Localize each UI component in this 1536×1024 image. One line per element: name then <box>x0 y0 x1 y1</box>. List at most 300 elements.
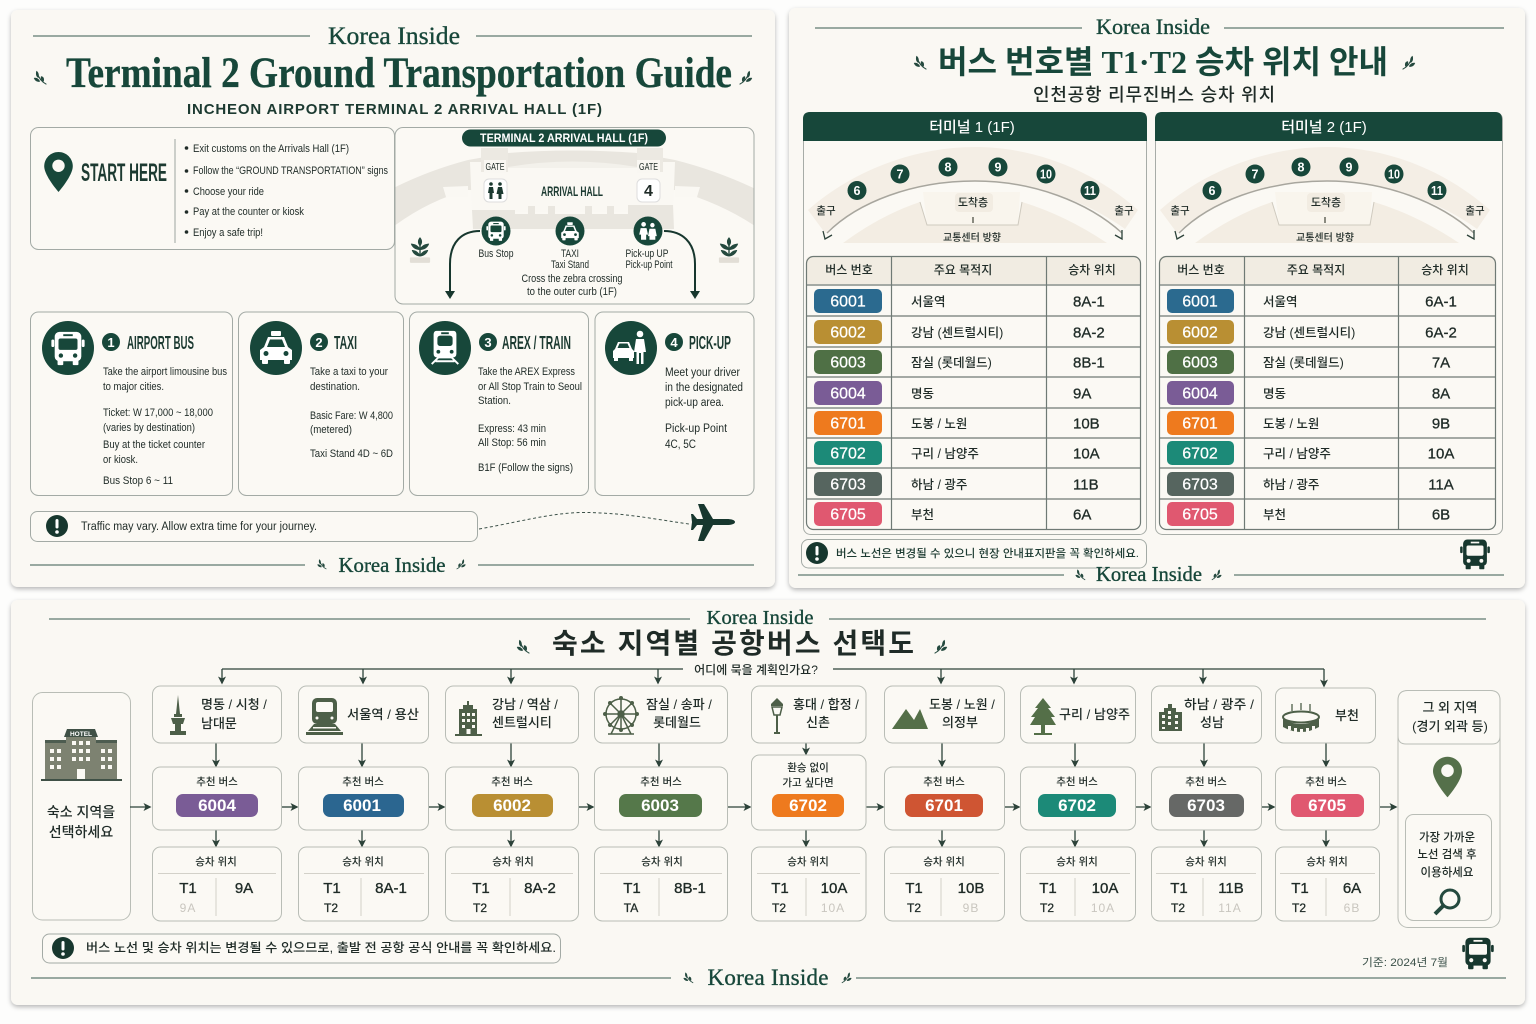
map labels: Pick-up Point <box>626 259 672 271</box>
row 6001: 6001 <box>1182 294 1218 310</box>
area: gangnam: 강남 / 역삼 / <box>492 697 558 712</box>
boarding map: 7 <box>897 168 904 182</box>
row 6003 <box>814 350 1105 374</box>
steps list: Choose your ride <box>193 186 264 198</box>
area: myeongdong: 명동 / 시청 / <box>201 697 267 712</box>
area: hanam: 성남 <box>1200 715 1224 730</box>
footer brand <box>31 965 1506 990</box>
card: taxi <box>238 312 404 496</box>
bus card: 6003: 추천 버스 <box>640 775 682 788</box>
boarding card: seoul station: T2 <box>324 901 338 915</box>
area: hanam <box>1152 686 1262 743</box>
boarding card: myeongdong: 승차 위치 <box>195 855 237 868</box>
row 6001: 6A-1 <box>1425 294 1457 310</box>
icon: tree <box>1030 698 1056 735</box>
row 6002: 8A-2 <box>1073 324 1105 342</box>
row 6705 <box>1167 502 1450 526</box>
callout: change warning: 버스 노선 및 승차 위치는 변경될 수 있으므로, 출발 전 공항 공식 안내를 꼭 확인하세요. <box>86 941 556 955</box>
panel: terminal 2 <box>1155 112 1502 534</box>
boarding map: 6 <box>1209 184 1216 198</box>
row 6004: 명동 <box>1263 387 1286 401</box>
arrow: bus stop route <box>445 231 480 299</box>
boarding card: jamsil: TA <box>624 901 638 915</box>
boarding card: dobong: 9B <box>963 901 979 915</box>
row 6004 <box>1167 381 1450 405</box>
icon: street lamp <box>771 698 783 734</box>
boarding map: 8 <box>1298 160 1305 174</box>
boarding card: guri <box>1020 847 1136 921</box>
bus card: 6002 <box>446 767 578 830</box>
boarding card: hongdae: 10A <box>821 901 845 915</box>
body text: Take a taxi to your <box>310 366 388 378</box>
bus card: 6004: 6004 <box>198 796 236 815</box>
body text: All Stop: 56 min <box>478 437 546 449</box>
icon: location pin <box>44 152 73 192</box>
right gate: GATE <box>639 162 658 173</box>
panel: terminal 1 <box>803 112 1147 534</box>
boarding map: 교통센터 방향 <box>943 231 1001 244</box>
area: jamsil <box>594 686 728 743</box>
boarding map: 9 <box>1346 160 1353 174</box>
boarding card: bucheon: T1 <box>1291 880 1309 897</box>
top brand header: Korea Inside <box>328 23 460 50</box>
title: 버스 번호별 T1·T2 승차 위치 안내 <box>938 44 1388 80</box>
steps list <box>185 143 388 239</box>
bus card: 6702 direct: 가고 싶다면 <box>782 777 834 789</box>
search advice box <box>1406 814 1492 920</box>
bus card: 6001 <box>298 767 428 830</box>
row 6701: 6701 <box>830 416 866 432</box>
title: 숙소 지역별 공항버스 선택도 <box>552 628 914 659</box>
bus table: 승차 위치 <box>1068 263 1116 277</box>
body text: Bus Stop 6 ~ 11 <box>103 475 173 487</box>
steps list: Pay at the counter or kiosk <box>193 206 305 218</box>
row 6703 <box>814 472 1099 496</box>
boarding card: dobong: T1 <box>905 880 923 897</box>
bus card: 6004 <box>152 767 282 830</box>
area: myeongdong: 남대문 <box>201 716 237 731</box>
icon: bus stop <box>482 216 510 246</box>
row 6003: 8B-1 <box>1073 354 1105 372</box>
row 6001: 서울역 <box>911 295 946 309</box>
boarding card: hongdae: 승차 위치 <box>787 855 829 868</box>
row 6703: 6703 <box>830 476 866 494</box>
bus card: 6703: 추천 버스 <box>1185 775 1227 788</box>
map labels: Bus Stop <box>478 248 514 260</box>
boarding card: jamsil: 승차 위치 <box>641 855 683 868</box>
boarding map <box>1160 147 1490 244</box>
flow arrows between steps <box>130 743 1396 846</box>
bus table: 주요 목적지 <box>934 263 992 277</box>
subtitle: 인천공항 리무진버스 승차 위치 <box>1033 85 1275 105</box>
arrow: dashed flight path <box>479 512 689 529</box>
row 6702: 6702 <box>1182 446 1218 462</box>
icon: right plant <box>719 237 739 263</box>
header bar: 터미널 2 (1F) <box>1281 119 1367 136</box>
boarding map: 10 <box>1040 168 1052 182</box>
bus card: 6703 <box>1152 767 1262 830</box>
body text: Basic Fare: W 4,800 <box>310 410 393 422</box>
icon: bus <box>42 321 94 375</box>
bus card: 6705: 6705 <box>1308 796 1346 815</box>
boarding map: 도착층 <box>1311 196 1341 209</box>
row 6002 <box>814 320 1105 344</box>
boarding card: hanam: 11A <box>1218 901 1242 915</box>
row 6703: 6703 <box>1182 476 1218 494</box>
boarding map: 11 <box>1431 184 1443 198</box>
icon: location pin <box>1433 757 1462 797</box>
heading <box>102 333 194 353</box>
area: dobong <box>884 686 1004 743</box>
bus card: 6001: 추천 버스 <box>342 775 384 788</box>
icon: hotel <box>41 729 122 781</box>
start box: choose lodging area <box>32 692 130 920</box>
label: 선택하세요 <box>49 824 113 840</box>
title: Terminal 2 Ground Transportation Guide <box>66 50 732 97</box>
icon: train <box>306 698 343 735</box>
bus card: 6004: 추천 버스 <box>196 775 238 788</box>
area: hongdae: 신촌 <box>806 715 830 730</box>
row 6705: 6A <box>1073 506 1091 524</box>
date note: 기준: 2024년 7월 <box>1362 956 1448 969</box>
icon: pick-up <box>634 216 662 246</box>
arrow: pick-up route <box>664 231 700 299</box>
icon: airplane <box>691 504 735 541</box>
body text: Taxi Stand 4D ~ 6D <box>310 448 393 460</box>
row 6003: 잠실 (롯데월드) <box>1263 355 1344 370</box>
icon: buildings <box>1159 704 1182 731</box>
bus card: 6002: 6002 <box>493 796 531 815</box>
boarding card: gangnam: T2 <box>473 901 487 915</box>
row 6003 <box>1167 350 1450 374</box>
panel: terminal 2 ground transportation guide <box>11 10 775 587</box>
row 6004: 6004 <box>830 386 866 402</box>
row 6004 <box>814 381 1091 405</box>
hall title pill: TERMINAL 2 ARRIVAL HALL (1F) <box>480 133 648 145</box>
icon: stadium <box>1283 703 1319 733</box>
boarding map: 6 <box>854 184 861 198</box>
map labels: Taxi Stand <box>551 259 589 271</box>
boarding map: 출구 <box>816 205 836 217</box>
icon: hotel: HOTEL <box>70 731 92 738</box>
panel: airport bus chooser by lodging area <box>11 600 1525 1005</box>
row 6703: 11A <box>1428 476 1454 494</box>
boarding map: 10 <box>1388 168 1400 182</box>
icon: restroom <box>484 179 507 202</box>
card: arex train <box>410 312 588 496</box>
boarding map <box>808 147 1138 244</box>
row 6002 <box>1167 320 1457 344</box>
row 6703: 하남 / 광주 <box>911 478 967 492</box>
row 6001: 서울역 <box>1263 295 1298 309</box>
row 6705: 부천 <box>911 507 934 522</box>
boarding card: dobong <box>884 847 1004 921</box>
bus card: 6702 direct: 환승 없이 <box>787 761 829 774</box>
boarding card: gangnam <box>446 847 578 921</box>
panel: other regions <box>1398 690 1500 928</box>
row 6002: 6002 <box>830 324 866 342</box>
boarding card: bucheon: 승차 위치 <box>1306 855 1348 868</box>
boarding card: dobong: T2 <box>907 901 921 915</box>
search advice box: 노선 검색 후 <box>1417 848 1477 861</box>
footer brand <box>30 553 754 577</box>
boarding map: 교통센터 방향 <box>1296 231 1354 244</box>
boarding card: myeongdong: 9A <box>235 880 253 897</box>
body text: or kiosk. <box>103 454 138 466</box>
row 6703: 하남 / 광주 <box>1263 478 1319 492</box>
bus table: 버스 번호 <box>1177 263 1225 277</box>
boarding card: gangnam: 8A-2 <box>524 880 556 897</box>
other regions header: 그 외 지역 <box>1422 700 1478 715</box>
map labels: Pick-up UP <box>626 248 668 260</box>
heading: 2 <box>315 335 323 350</box>
boarding map: 출구 <box>1114 205 1134 217</box>
body text <box>478 366 582 474</box>
bus table <box>1159 256 1496 530</box>
row 6701: 10B <box>1073 416 1100 432</box>
bus card: 6702 <box>1020 767 1136 830</box>
callout: traffic note <box>30 512 478 542</box>
body text: to major cities. <box>103 381 164 393</box>
heading: AREX / TRAIN <box>502 333 571 353</box>
area: hanam: 하남 / 광주 / <box>1184 697 1254 712</box>
row 6705: 6705 <box>830 506 866 524</box>
body text: in the designated <box>665 382 743 394</box>
boarding card: myeongdong: 9A <box>180 901 196 915</box>
map labels: TAXI <box>561 248 579 260</box>
boarding card: hanam: 11B <box>1218 880 1244 897</box>
map labels <box>478 248 672 298</box>
boarding card: jamsil <box>594 847 728 921</box>
subtitle: INCHEON AIRPORT TERMINAL 2 ARRIVAL HALL (1F) <box>187 101 602 118</box>
body text: or All Stop Train to Seoul <box>478 381 582 393</box>
heading: PICK-UP <box>689 333 731 353</box>
boarding card: hanam: T1 <box>1170 880 1188 897</box>
header bar: 터미널 1 (1F) <box>929 119 1015 136</box>
body text: Buy at the ticket counter <box>103 439 205 451</box>
boarding card: guri: 승차 위치 <box>1056 855 1098 868</box>
row 6002: 강남 (센트럴시티) <box>1263 326 1355 340</box>
icon: seoul tower <box>170 695 186 735</box>
area: gangnam: 센트럴시티 <box>492 715 552 730</box>
row 6004: 8A <box>1432 386 1450 402</box>
header bar <box>1155 112 1502 141</box>
row 6002: 강남 (센트럴시티) <box>911 326 1003 340</box>
row 6702: 10A <box>1428 446 1454 462</box>
icon: pick-up <box>605 321 657 375</box>
bus table: 승차 위치 <box>1421 263 1469 277</box>
boarding card: bucheon: 6A <box>1343 880 1361 897</box>
area: bucheon: 부천 <box>1335 708 1359 723</box>
row 6701: 도봉 / 노원 <box>911 417 967 431</box>
row 6701 <box>814 411 1100 435</box>
row 6004: 9A <box>1073 386 1091 402</box>
boarding card: guri: 10A <box>1091 901 1115 915</box>
row 6701 <box>1167 411 1450 435</box>
bus card: 6703: 6703 <box>1187 796 1225 815</box>
body text: (varies by destination) <box>103 422 195 434</box>
row 6701: 6701 <box>1182 416 1218 432</box>
row 6001 <box>814 289 1105 313</box>
row 6002: 6002 <box>1182 324 1218 342</box>
row 6702 <box>814 441 1100 465</box>
bus card: 6701: 6701 <box>925 796 963 815</box>
area: hongdae <box>752 686 866 743</box>
body text: Pick-up Point <box>665 423 728 435</box>
body text <box>310 366 393 460</box>
row 6705: 부천 <box>1263 507 1286 522</box>
boarding card: dobong: 승차 위치 <box>923 855 965 868</box>
heading <box>665 333 731 353</box>
body text: (metered) <box>310 424 352 436</box>
body text: Express: 43 min <box>478 423 546 435</box>
area: dobong: 도봉 / 노원 / <box>929 697 995 712</box>
boarding card: hongdae <box>752 847 866 921</box>
heading: AIRPORT BUS <box>127 333 194 353</box>
top brand header: Korea Inside <box>1096 14 1210 39</box>
heading <box>479 333 571 353</box>
boarding card: myeongdong <box>152 847 282 921</box>
row 6003: 잠실 (롯데월드) <box>911 355 992 370</box>
row 6002: 6A-2 <box>1425 324 1457 342</box>
area: hongdae: 홍대 / 합정 / <box>793 697 859 712</box>
hall title pill <box>462 130 666 146</box>
question and branching arrows: 어디에 묵을 계획인가요? <box>694 663 818 677</box>
boarding card: seoul station: T1 <box>323 880 341 897</box>
bus card: 6001: 6001 <box>343 796 381 815</box>
boarding card: seoul station: 승차 위치 <box>342 855 384 868</box>
left gate <box>484 160 506 173</box>
boarding card: guri: 10A <box>1092 880 1118 897</box>
body text: Take the AREX Express <box>478 366 576 378</box>
body text: Take the airport limousine bus <box>103 366 228 378</box>
boarding card: jamsil: 8B-1 <box>674 880 706 897</box>
row 6705: 6705 <box>1182 506 1218 524</box>
area: bucheon <box>1276 688 1376 743</box>
gate number 4 <box>637 179 660 202</box>
bus card: 6702 direct: 6702 <box>789 796 827 815</box>
start here heading: START HERE <box>81 159 167 187</box>
hall floor plan <box>396 148 754 229</box>
icon: bus <box>1460 540 1490 569</box>
search advice box: 가장 가까운 <box>1419 831 1475 844</box>
bus card: 6702: 추천 버스 <box>1056 775 1098 788</box>
card: airport bus <box>30 312 232 496</box>
heading <box>310 333 357 353</box>
area: guri <box>1020 686 1136 743</box>
row 6702 <box>1167 441 1454 465</box>
boarding card: jamsil: T1 <box>623 880 641 897</box>
body text <box>103 366 228 487</box>
row 6004: 명동 <box>911 387 934 401</box>
area: guri: 구리 / 남양주 <box>1059 707 1130 722</box>
icon: ferris wheel <box>603 696 639 734</box>
boarding card: bucheon: T2 <box>1292 901 1306 915</box>
map labels: Cross the zebra crossing <box>522 273 622 285</box>
boarding card: hanam: T2 <box>1171 901 1185 915</box>
panel: boarding locations by bus number <box>789 8 1525 588</box>
boarding card: hanam: 승차 위치 <box>1185 855 1227 868</box>
boarding card: hongdae: T2 <box>772 901 786 915</box>
boarding map: 출구 <box>1170 205 1190 217</box>
boarding map: 도착층 <box>958 196 988 209</box>
boarding card: hongdae: T1 <box>771 880 789 897</box>
heading: TAXI <box>334 333 357 353</box>
area: jamsil: 롯데월드 <box>653 715 701 730</box>
area: seoul station <box>298 686 428 743</box>
heading: 3 <box>484 335 492 350</box>
area: jamsil: 잠실 / 송파 / <box>646 697 712 712</box>
icon: mountains <box>892 709 928 729</box>
body text: B1F (Follow the signs) <box>478 462 573 474</box>
row 6003: 6003 <box>1182 354 1218 372</box>
boarding card: dobong: 10B <box>958 880 984 897</box>
row 6001: 6001 <box>830 294 866 310</box>
bus card: 6701: 추천 버스 <box>923 775 965 788</box>
map labels: to the outer curb (1F) <box>527 286 617 298</box>
heading: 4 <box>670 335 678 350</box>
bus table <box>806 256 1140 530</box>
callout: route change note <box>802 540 1146 568</box>
row 6702: 구리 / 남양주 <box>1263 447 1331 461</box>
body text: pick-up area. <box>665 397 724 409</box>
arrival hall label: ARRIVAL HALL <box>541 183 603 199</box>
bus card: 6702: 6702 <box>1058 796 1096 815</box>
body text: Station. <box>478 395 511 407</box>
boarding card: myeongdong: T1 <box>179 880 197 897</box>
boarding card: bucheon <box>1276 847 1380 921</box>
right gate <box>637 160 660 173</box>
bus card: 6002: 추천 버스 <box>491 775 533 788</box>
steps list: Enjoy a safe trip! <box>193 227 263 239</box>
row 6705: 6B <box>1432 506 1450 524</box>
bus table: 버스 번호 <box>825 263 873 277</box>
body text: destination. <box>310 381 360 393</box>
panel: start here <box>30 128 394 250</box>
left gate: GATE <box>486 162 505 173</box>
boarding card: bucheon: 6B <box>1344 901 1360 915</box>
area: dobong: 의정부 <box>942 715 978 730</box>
row 6703: 11B <box>1073 476 1099 494</box>
boarding card: hanam <box>1152 847 1262 921</box>
search advice box: 이용하세요 <box>1421 866 1474 879</box>
body text: Ticket: W 17,000 ~ 18,000 <box>103 407 213 419</box>
row 6001 <box>1167 289 1457 313</box>
boarding map: 8 <box>945 160 952 174</box>
icon: taxi <box>250 321 302 375</box>
bus card: 6003: 6003 <box>641 796 679 815</box>
footer brand: Korea Inside <box>708 965 828 990</box>
boarding map: 11 <box>1084 184 1096 198</box>
callout: route change note: 버스 노선은 변경될 수 있으니 현장 안내표지판을 꼭 확인하세요. <box>836 547 1139 560</box>
icon: train <box>419 321 471 375</box>
other regions header <box>1398 690 1500 744</box>
icon: bus <box>1462 938 1494 969</box>
heading: 1 <box>107 335 115 350</box>
boarding card: guri: T2 <box>1040 901 1054 915</box>
footer brand <box>798 562 1504 586</box>
row 6702: 6702 <box>830 446 866 462</box>
area: gangnam <box>446 686 578 743</box>
boarding card: hongdae: 10A <box>821 880 847 897</box>
label: 숙소 지역을 <box>47 804 115 820</box>
area: myeongdong <box>152 686 282 743</box>
row 6702: 10A <box>1073 446 1100 462</box>
callout: change warning <box>42 934 560 963</box>
boarding card: gangnam: 승차 위치 <box>492 855 534 868</box>
gate number 4: 4 <box>644 183 653 200</box>
boarding card: seoul station: 8A-1 <box>375 880 407 897</box>
